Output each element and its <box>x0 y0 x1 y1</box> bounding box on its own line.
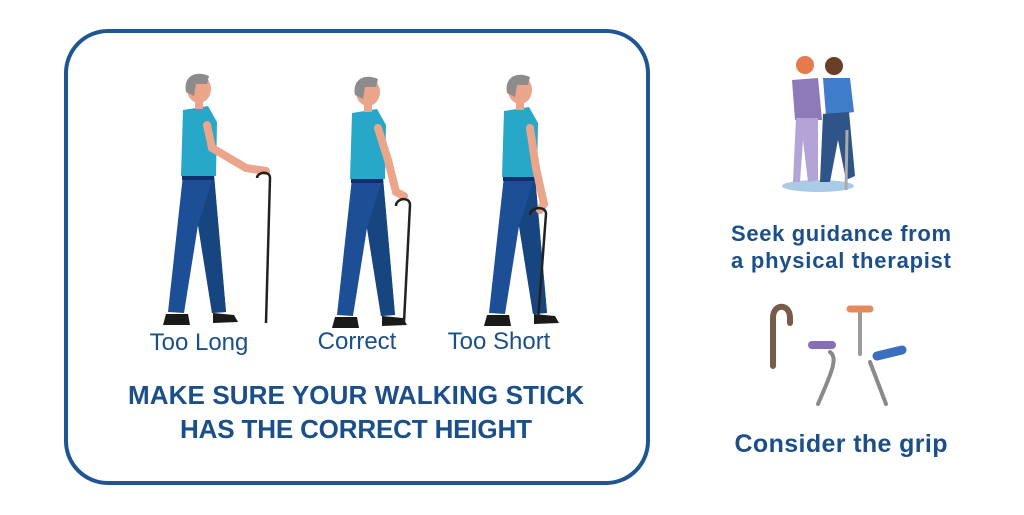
labels: Too Short <box>448 328 551 355</box>
text: seek guidance: Seek guidance from <box>731 221 951 246</box>
figure: too short <box>484 75 559 326</box>
figure: too long <box>163 74 270 325</box>
labels <box>150 328 551 356</box>
heading: MAKE SURE YOUR WALKING STICK <box>128 380 584 410</box>
heading <box>128 380 584 444</box>
labels: Correct <box>318 328 397 355</box>
text: consider the grip: Consider the grip <box>734 430 948 458</box>
panel: walking stick height <box>66 31 648 483</box>
icon: therapist with patient <box>782 56 855 192</box>
text: seek guidance: a physical therapist <box>731 248 952 273</box>
text: seek guidance <box>731 221 952 273</box>
icon: cane grips <box>773 307 902 404</box>
labels: Too Long <box>150 329 248 356</box>
figure: correct <box>332 77 410 328</box>
heading: HAS THE CORRECT HEIGHT <box>180 414 532 444</box>
